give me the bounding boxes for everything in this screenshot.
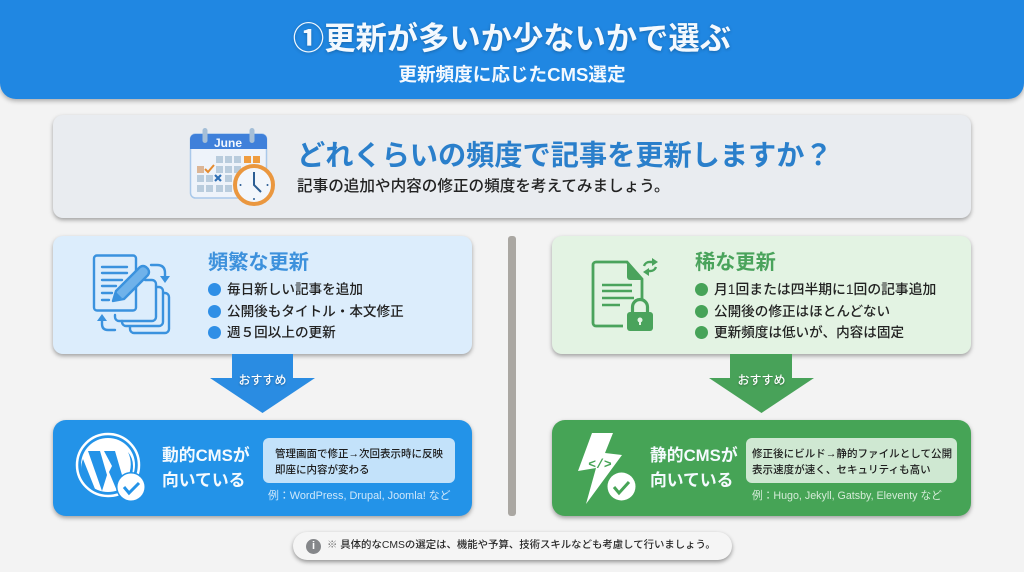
description text (275, 448, 443, 476)
card heading: 動的CMSが (162, 446, 250, 465)
bullet list: frequent updates: 公開後もタイトル・本文修正 (227, 304, 404, 319)
card: static CMS (552, 420, 971, 516)
question heading: どれくらいの頻度で記事を更新しますか？ (297, 139, 833, 171)
description box (263, 438, 455, 483)
description box (746, 438, 957, 483)
icon: lightning bolt with check (578, 433, 636, 504)
title: ①更新が多いか少ないかで選ぶ (293, 21, 731, 56)
divider (508, 236, 516, 516)
icon: lightning bolt with check: </> (588, 457, 612, 472)
arrow: recommended, dynamic (210, 354, 315, 413)
heading: frequent updates: 頻繁な更新 (208, 252, 309, 274)
description text: 管理画面で修正→次回表示時に反映 (275, 448, 443, 460)
card heading (650, 446, 738, 490)
card heading: 向いている (650, 471, 733, 490)
arrow: recommended, static (709, 354, 814, 413)
arrow label: おすすめ (737, 373, 786, 387)
icon: info (306, 539, 321, 554)
panel: question (53, 115, 971, 218)
examples: 例：Hugo, Jekyll, Gatsby, Eleventy など (752, 490, 942, 502)
description text: 表示速度が速く、セキュリティも高い (752, 464, 931, 476)
bullet list: frequent updates: 毎日新しい記事を追加 (227, 282, 363, 297)
icon: WordPress logo with check (76, 432, 144, 500)
description text: 修正後にビルド→静的ファイルとして公開 (752, 448, 952, 460)
description text: 即座に内容が変わる (275, 464, 370, 476)
icon: documents with pencil (92, 254, 170, 334)
footnote text: ※ 具体的なCMSの選定は、機能や予算、技術スキルなども考慮して行いましょう。 (327, 540, 716, 551)
card heading: 静的CMSが (650, 446, 738, 465)
bullet list: rare updates: 更新頻度は低いが、内容は固定 (714, 325, 904, 340)
card heading (162, 446, 250, 490)
bullet list: rare updates: 月1回または四半期に1回の記事追加 (714, 282, 936, 297)
header banner (0, 0, 1024, 99)
bullet list: frequent updates: 週５回以上の更新 (227, 325, 336, 340)
card: dynamic CMS (53, 420, 472, 516)
footnote (293, 532, 732, 560)
arrow label: おすすめ (238, 373, 286, 387)
heading: rare updates: 稀な更新 (695, 252, 776, 274)
icon: locked document (592, 258, 658, 331)
icon: calendar and clock (190, 128, 275, 206)
card heading: 向いている (162, 471, 245, 490)
description text (752, 448, 952, 476)
icon: calendar and clock: June (214, 136, 242, 150)
icon: info: i (312, 540, 315, 552)
bullet list: rare updates (695, 282, 936, 340)
examples: 例：WordPress, Drupal, Joomla! など (268, 490, 451, 502)
bullet list: rare updates: 公開後の修正はほとんどない (714, 304, 890, 319)
panel: frequent updates (53, 236, 472, 354)
subtitle: 更新頻度に応じたCMS選定 (398, 64, 626, 85)
panel: rare updates (552, 236, 971, 354)
question description: 記事の追加や内容の修正の頻度を考えてみましょう。 (297, 178, 670, 195)
bullet list: frequent updates (208, 282, 404, 340)
